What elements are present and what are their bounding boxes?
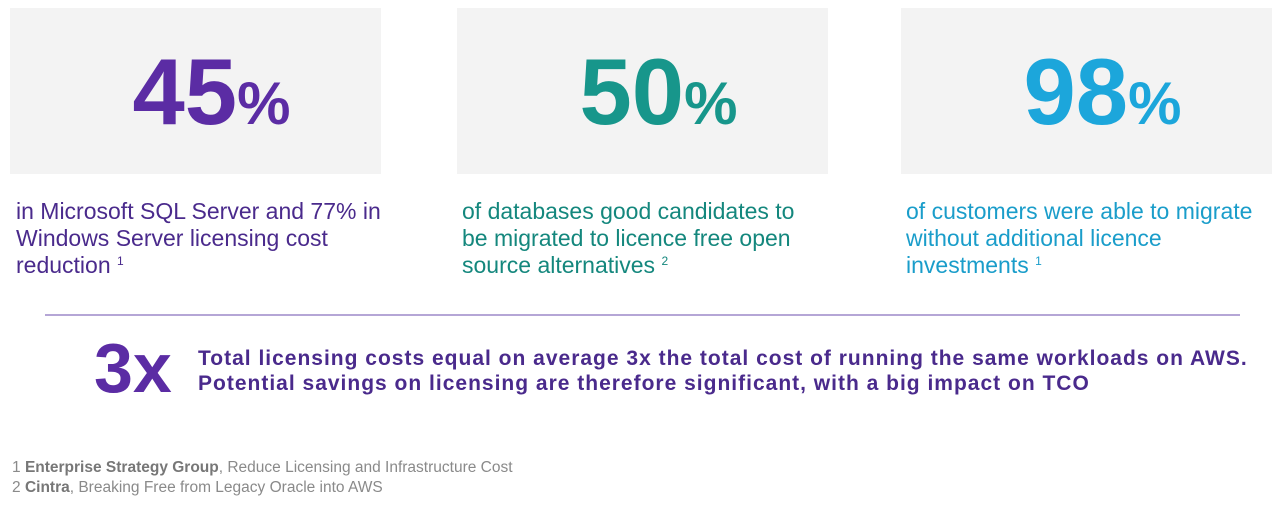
footnotes	[12, 459, 513, 496]
footnotes: 2 Cintra, Breaking Free from Legacy Oracle into AWS	[12, 479, 383, 496]
callout text: Total licensing costs equal on average 3x the total cost of running the same workloads on AWS.	[198, 347, 1248, 370]
callout text: Potential savings on licensing are therefore significant, with a big impact on TCO	[198, 372, 1090, 395]
panel: 50% stat	[457, 8, 828, 174]
text: 98% description: of customers were able to migrate without additional licence investments 1	[906, 198, 1252, 278]
text: 50% description: of databases good candidates to be migrated to licence free open source alternatives 2	[462, 198, 794, 278]
panel: 98% stat: 98%	[1024, 39, 1181, 144]
panel: 98% stat	[901, 8, 1272, 174]
text: 45% description: in Microsoft SQL Server and 77% in Windows Server licensing cost reduction 1	[16, 198, 381, 278]
panel: 45% stat: 45%	[133, 39, 290, 144]
callout text	[198, 347, 1248, 395]
callout: 3x	[94, 329, 1248, 407]
footnotes: 1 Enterprise Strategy Group, Reduce Licensing and Infrastructure Cost	[12, 459, 513, 476]
panel: 45% stat	[10, 8, 381, 174]
big 3x: 3x	[94, 329, 172, 407]
panel: 50% stat: 50%	[580, 39, 737, 144]
